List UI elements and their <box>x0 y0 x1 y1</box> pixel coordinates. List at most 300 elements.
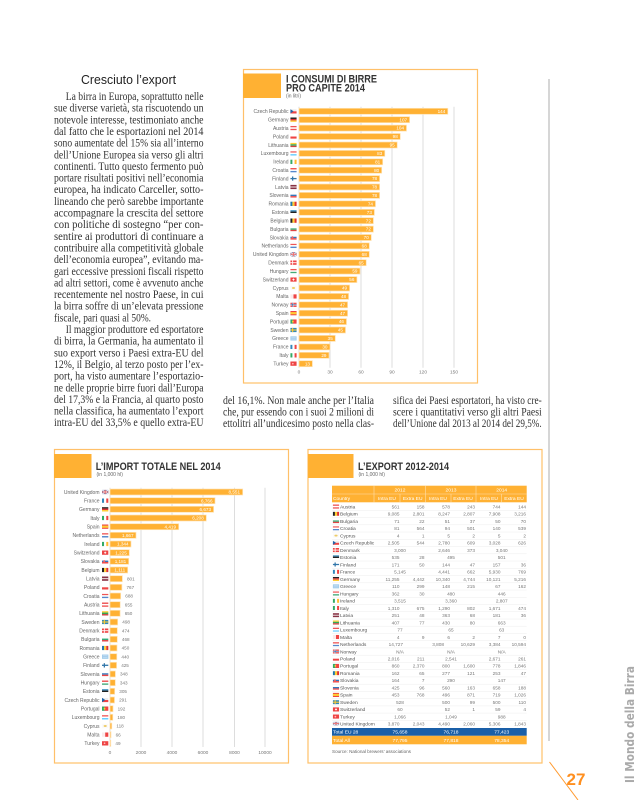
bar: Latvia: 801 <box>127 576 135 581</box>
row: Estonia <box>333 555 506 561</box>
text block: left column article: con politiche di sostegno “per con- <box>54 219 204 231</box>
row: Switzerland: 4 <box>523 707 526 712</box>
text block: left column article: la birra soffre di un’elevata pressione <box>54 301 204 313</box>
bar: Belgium: 72 <box>366 218 371 223</box>
row: Finland: 171 <box>392 562 400 567</box>
bar: Portugal: Portugal <box>270 319 288 325</box>
bar: Finland: Finland <box>83 663 100 669</box>
row: Sweden: 99 <box>470 700 475 705</box>
bar: Austria <box>84 602 133 608</box>
row: Ireland <box>333 599 508 605</box>
row: Germany: 5,216 <box>514 577 526 582</box>
row: Norway: N/A <box>396 649 405 654</box>
row: France: France <box>340 570 356 576</box>
row: Greece: 110 <box>392 584 400 589</box>
row: Austria <box>333 504 526 510</box>
text block: left column article <box>54 91 204 429</box>
row: Netherlands: Netherlands <box>340 642 367 648</box>
bar: Spain: Spain <box>276 311 289 317</box>
row: Latvia: 36 <box>521 613 526 618</box>
row: Croatia <box>333 526 526 532</box>
bar: Czech Republic <box>64 697 127 704</box>
table header: Extra EU <box>453 496 473 502</box>
row: Croatia: 501 <box>467 526 475 531</box>
bar: Poland: 767 <box>126 585 135 590</box>
row: Denmark: 3,000 <box>394 548 406 553</box>
row: Sweden: Sweden <box>340 700 358 706</box>
row: Austria: 561 <box>392 504 400 509</box>
bar: Sweden <box>81 619 130 626</box>
row: Italy: 1,290 <box>438 606 450 611</box>
bar: Estonia <box>83 688 127 695</box>
bar: Portugal <box>270 319 346 325</box>
row: Croatia: 94 <box>445 526 450 531</box>
bar: Lithuania <box>268 142 397 149</box>
row: Austria: Austria <box>340 504 356 510</box>
row: Netherlands: 10,594 <box>512 642 526 647</box>
source note: Source: National brewers’ associations <box>332 749 412 754</box>
row: Italy <box>333 606 526 612</box>
bar: Romania: 74 <box>368 201 373 206</box>
panel: import totale <box>54 450 288 763</box>
panel title: PRO CAPITE 2014 <box>286 83 366 95</box>
row: United Kingdom: 3,870 <box>388 721 400 726</box>
bar: Hungary: 59 <box>352 269 358 274</box>
row: Hungary: Hungary <box>340 591 359 597</box>
bar: Slovakia: Slovakia <box>270 235 289 241</box>
row: Turkey <box>333 714 506 720</box>
row: Denmark: Denmark <box>340 548 360 554</box>
bar: Belgium: Belgium <box>81 568 100 574</box>
bar: Turkey: 13 <box>305 361 310 366</box>
bar: Denmark <box>79 628 130 634</box>
row: Romania: Romania <box>340 671 360 677</box>
row: Denmark: 3,040 <box>496 548 508 553</box>
row: Croatia: 140 <box>493 526 501 531</box>
row: Switzerland <box>333 707 526 713</box>
bar: United Kingdom: 8,551 <box>228 490 240 495</box>
panel title: (in 1,000 hl) <box>358 472 385 478</box>
row: Belgium: Belgium <box>340 512 358 518</box>
row: Latvia: 68 <box>470 613 475 618</box>
icon: orange title block <box>308 454 354 478</box>
panel title: L’EXPORT 2012-2014 <box>358 461 450 473</box>
bar: Cyprus: 118 <box>116 724 124 729</box>
row: Total EU 28: Total EU 28 <box>333 730 359 736</box>
row: Italy: 802 <box>467 606 475 611</box>
bar: Cyprus <box>84 723 124 730</box>
panel title: (in litri) <box>286 94 301 100</box>
row: Spain: 719 <box>493 693 501 698</box>
bar: Latvia <box>86 576 135 582</box>
bar: Lithuania: Lithuania <box>79 611 100 617</box>
bar: Ireland: 1,344 <box>117 542 129 547</box>
bar: Malta: Malta <box>276 294 289 300</box>
axis labels: 30 <box>327 370 333 376</box>
bar: Slovakia: 70 <box>364 235 369 240</box>
bar: United Kingdom: United Kingdom <box>64 490 100 496</box>
bar: Netherlands: Netherlands <box>262 244 289 250</box>
text block: left column article: sono aumentate del 15% sia all’interno <box>54 138 204 150</box>
bar: Italy <box>90 515 206 522</box>
bar: Lithuania: 95 <box>390 143 395 148</box>
row: Finland: 36 <box>521 562 526 567</box>
bar: Greece <box>83 654 130 660</box>
row: Finland: 157 <box>493 562 501 567</box>
bar: Lithuania: Lithuania <box>268 143 289 149</box>
row: Ireland: 2,807 <box>496 599 508 604</box>
bar: Finland: Finland <box>272 176 289 182</box>
bar: Luxembourg <box>72 714 126 721</box>
text block: middle column article: ettolitri all’undicesimo posto nella clas- <box>223 418 374 430</box>
row: Finland: 47 <box>470 562 475 567</box>
row: Total All: Total All <box>333 738 350 744</box>
bar: Slovenia <box>269 192 380 199</box>
bar: Belgium <box>81 567 128 574</box>
row: Lithuania: Lithuania <box>340 620 360 626</box>
row: Malta: 4 <box>397 635 400 640</box>
row: Portugal: Portugal <box>340 664 358 670</box>
row: Belgium: 2,801 <box>413 512 425 517</box>
row: Netherlands: 10,629 <box>461 642 475 647</box>
bar: Italy <box>279 352 329 359</box>
row: Romania: 65 <box>419 671 425 676</box>
row: Portugal: 800 <box>442 664 450 669</box>
panel: consumi di birre pro capite <box>243 70 478 383</box>
bar: Slovenia: 78 <box>372 193 378 198</box>
text block: left column article: nella classifica, ha aumentato l’export <box>54 406 204 418</box>
text block: right column article: sifica dei Paesi esportatori, ha visto cre- <box>393 395 542 407</box>
bar: Denmark: Denmark <box>268 261 289 267</box>
bar chart: consumption per capita <box>253 107 458 376</box>
panel title <box>96 461 221 478</box>
bar: Finland: 425 <box>121 663 129 668</box>
bar: Belgium <box>270 218 373 224</box>
row: Spain: Spain <box>340 693 353 699</box>
bar: Denmark: 474 <box>122 628 130 633</box>
bar: Ireland: Ireland <box>84 542 100 548</box>
page number: 27 <box>566 770 585 789</box>
text block: left column article: La birra in Europa, soprattutto nelle <box>66 91 204 103</box>
bar: Switzerland: Switzerland <box>263 277 289 283</box>
row: Croatia: 564 <box>417 526 425 531</box>
text block: middle column article: che, pur essendo con i suoi 2 milioni di <box>223 406 374 418</box>
bar: Cyprus: Cyprus <box>273 286 289 292</box>
bar: Bulgaria: 72 <box>366 227 371 232</box>
row: Slovakia: Slovakia <box>340 678 359 684</box>
row: Belgium: 7,908 <box>489 512 501 517</box>
row: Lithuania: 407 <box>392 620 400 625</box>
row: Italy: 474 <box>518 606 526 611</box>
text block: left column article: gari eccessive pressioni fiscali rispetto <box>54 266 204 278</box>
table header <box>332 486 527 502</box>
bar: United Kingdom: 68 <box>362 252 367 257</box>
bar: Hungary <box>270 268 360 275</box>
bar: Ireland: Ireland <box>273 160 289 166</box>
row: France: 769 <box>518 570 526 575</box>
row: France: 662 <box>467 570 475 575</box>
row: Finland <box>333 562 526 568</box>
row: Slovakia: 290 <box>447 678 455 683</box>
row: Cyprus: 1 <box>422 533 425 538</box>
row: Germany: 10,340 <box>436 577 450 582</box>
bar: Poland: Poland <box>84 585 100 591</box>
bar: Hungary: 343 <box>120 680 128 685</box>
row: Cyprus: 2 <box>472 533 475 538</box>
table header: Intra EU <box>480 496 498 502</box>
row: Slovakia: 164 <box>392 678 400 683</box>
row: Czech Republic: 626 <box>518 541 526 546</box>
bar: Turkey: Turkey <box>273 362 289 368</box>
bar: Germany: 107 <box>399 117 408 122</box>
bar: Latvia: Latvia <box>275 185 289 191</box>
row: Italy: Italy <box>340 606 350 612</box>
bar: Netherlands <box>262 243 369 250</box>
row: Lithuania: 80 <box>470 620 475 625</box>
bar: Malta: Malta <box>87 733 100 739</box>
row: Latvia: 363 <box>442 613 450 618</box>
row: Romania: 47 <box>521 671 526 676</box>
bar: Poland: 98 <box>393 134 398 139</box>
row: Greece: Greece <box>340 584 356 590</box>
bar: Romania <box>268 201 376 208</box>
bar: Malta: 48 <box>341 294 347 299</box>
row: Poland: 211 <box>417 656 425 661</box>
row: Malta <box>333 635 526 641</box>
text block: right column article <box>393 395 542 430</box>
text block: left column article: ad altri settori, come è avvenuto anche <box>54 277 204 289</box>
row: Malta: Malta <box>340 635 352 641</box>
bar: Austria: 655 <box>125 602 133 607</box>
row: Hungary: 446 <box>498 591 506 596</box>
row: Hungary: 362 <box>392 591 400 596</box>
row: Turkey: 1,066 <box>394 714 406 719</box>
text block: middle column article <box>223 395 374 430</box>
bar: Hungary <box>81 680 128 686</box>
panel title: (in 1,000 hl) <box>96 472 123 478</box>
row: Lithuania: 663 <box>498 620 506 625</box>
row: Greece <box>333 584 526 590</box>
row: Romania: 253 <box>493 671 501 676</box>
row: United Kingdom: 5,306 <box>489 721 501 726</box>
text block: left column article: contribuire alla competitività globale <box>54 242 204 254</box>
row: Switzerland: 60 <box>397 707 403 712</box>
bar: Latvia: 78 <box>372 185 378 190</box>
bar: Slovenia: Slovenia <box>80 672 100 678</box>
text block: right column article: dell’Unione dal 2013 al 2014 del 29,5%. <box>393 418 542 430</box>
row: Spain <box>333 693 526 699</box>
text block: left column article: recentemente nel nostro Paese, in cui <box>54 289 204 301</box>
text block: left column article: 12%, il Belgio, al terzo posto per l’ex- <box>54 359 204 371</box>
row: Bulgaria: Bulgaria <box>340 519 358 525</box>
bar: Bulgaria: Bulgaria <box>270 227 289 233</box>
panel title: I CONSUMI DI BIRRE <box>286 74 377 86</box>
bar: Spain: Spain <box>87 525 100 531</box>
row: Netherlands: 14,727 <box>389 642 403 647</box>
row: Greece: 67 <box>495 584 501 589</box>
bar: Czech Republic: Czech Republic <box>253 109 289 115</box>
row: Switzerland: Switzerland <box>340 707 366 713</box>
bar: Croatia: Croatia <box>83 594 100 600</box>
bar: Bulgaria <box>81 636 130 643</box>
bar: Switzerland <box>263 277 357 283</box>
row: United Kingdom: 4,490 <box>438 721 450 726</box>
bar: Switzerland <box>74 550 129 556</box>
bar: Switzerland: Switzerland <box>74 551 100 557</box>
row: Austria: 578 <box>442 504 450 509</box>
bar: Sweden: Sweden <box>270 328 289 334</box>
bar: Norway: 47 <box>340 302 346 307</box>
row: Slovenia: 560 <box>442 685 450 690</box>
row: Estonia: 28 <box>419 555 425 560</box>
row: Latvia <box>333 613 526 619</box>
bar: Turkey: Turkey <box>84 741 100 747</box>
axis labels: 4000 <box>167 750 178 756</box>
row: Slovenia: Slovenia <box>340 685 359 691</box>
text block: left column article: accompagnare la crescita del settore <box>54 208 204 220</box>
row: Belgium: 8,247 <box>438 512 450 517</box>
row: Luxembourg <box>333 628 505 634</box>
row: Greece: 215 <box>467 584 475 589</box>
icon: orange title block <box>54 454 92 478</box>
bar: Estonia: Estonia <box>83 689 100 695</box>
text block: right column article: scere i quantitativi verso gli altri Paesi <box>393 406 542 418</box>
row: Total All: 77,818 <box>444 738 459 744</box>
row: Italy: 1,671 <box>489 606 501 611</box>
text block: left column article: port, ha visto aumentare l’esportazio- <box>54 371 204 383</box>
row: Germany: 4,442 <box>413 577 425 582</box>
heading: Cresciuto l'export: Cresciuto l’export <box>81 72 176 87</box>
row: Spain: 453 <box>392 693 400 698</box>
bar: Italy: 29 <box>321 353 327 358</box>
row: Slovakia: 147 <box>498 678 506 683</box>
bar: Spain <box>276 310 348 317</box>
bar: Norway: Norway <box>272 303 289 309</box>
bar: Slovenia: Slovenia <box>269 193 289 199</box>
bar: Bulgaria <box>270 226 373 233</box>
axis labels: 8000 <box>229 750 240 756</box>
table header: 2013 <box>446 488 457 494</box>
bar: Slovakia: 1,181 <box>115 559 127 564</box>
row: Czech Republic: 609 <box>467 541 475 546</box>
bar: Norway <box>272 302 348 309</box>
axis labels: 90 <box>389 370 395 376</box>
icon: orange title block <box>243 74 281 98</box>
bar: Greece: 35 <box>328 336 333 341</box>
row: Finland: 144 <box>442 562 450 567</box>
axis labels: 10000 <box>258 750 272 756</box>
row: Poland: 2,016 <box>388 656 400 661</box>
bar: Estonia <box>272 209 374 216</box>
row: Czech Republic <box>333 541 526 547</box>
row: Poland: 2,671 <box>489 656 501 661</box>
row: Spain: 871 <box>467 693 475 698</box>
bar: Greece: Greece <box>83 655 100 661</box>
row: Romania: 162 <box>392 671 400 676</box>
row: Denmark: 373 <box>467 548 475 553</box>
row: Total All: 77,795 <box>393 738 408 744</box>
bar: Greece: Greece <box>272 336 289 342</box>
table header: 2012 <box>395 488 406 494</box>
bar: Romania: 450 <box>122 646 130 651</box>
bar: Croatia: 688 <box>125 594 133 599</box>
bar: Denmark <box>268 260 366 266</box>
row: Ireland: 3,360 <box>445 599 457 604</box>
row: Malta: 7 <box>498 635 501 640</box>
bar: Croatia: Croatia <box>272 168 289 174</box>
row: Sweden: 528 <box>396 700 404 705</box>
row: Luxembourg: Luxembourg <box>340 627 367 633</box>
bar: Hungary: Hungary <box>81 681 100 687</box>
bar: Greece <box>272 335 335 342</box>
bar: Spain: 4,419 <box>164 524 176 529</box>
row: Poland <box>333 656 526 662</box>
row: Malta: 9 <box>422 635 425 640</box>
bar: Croatia <box>272 167 382 174</box>
row: Hungary: 480 <box>447 591 455 596</box>
row: Poland: Poland <box>340 656 356 662</box>
row: Sweden: 500 <box>493 700 501 705</box>
text block: left column article: di birra, la Germania, ha aumentato il <box>54 336 204 348</box>
text block: left column article: ne delle proprie birre fuori dall’Europa <box>54 382 204 394</box>
bar: Ireland <box>84 541 131 548</box>
table: export by country <box>332 486 527 744</box>
axis labels: 6000 <box>198 750 209 756</box>
row: Slovakia <box>333 678 506 684</box>
row: Lithuania: 77 <box>419 620 425 625</box>
row: France: 4,441 <box>438 570 450 575</box>
section label: Il Mondo della Birra: Il Mondo della Birra <box>622 666 637 783</box>
bar: Switzerland: 56 <box>349 277 355 282</box>
axis labels: 60 <box>358 370 364 376</box>
bar: Lithuania: 650 <box>125 611 133 616</box>
bar: Ireland <box>273 159 383 166</box>
row: Slovenia <box>333 686 526 692</box>
row: Turkey: 988 <box>498 714 506 719</box>
bar: Latvia: Latvia <box>86 577 100 583</box>
row: Croatia: 539 <box>518 526 526 531</box>
row: Croatia: 81 <box>394 526 400 531</box>
page corner diagonal line <box>550 762 578 800</box>
text block: left column article: dell’Unione Europea sia verso gli altri <box>54 149 204 161</box>
bar: Turkey: 49 <box>115 741 121 746</box>
axis labels: 150 <box>450 370 458 376</box>
row: Greece: 162 <box>518 584 526 589</box>
row: Estonia: 501 <box>498 555 506 560</box>
row: Total All <box>332 736 527 744</box>
row: Greece: 148 <box>442 584 450 589</box>
text block: middle column article: del 16,1%. Non male anche per l’Italia <box>223 395 374 407</box>
row: Portugal: 2,370 <box>413 664 425 669</box>
row: Portugal: 1,846 <box>514 664 526 669</box>
row: Malta: 2 <box>472 635 475 640</box>
row: Italy: 675 <box>417 606 425 611</box>
axis labels: 0 <box>109 750 112 756</box>
bar: Italy: 6,208 <box>192 516 204 521</box>
row: Bulgaria: 70 <box>521 519 526 524</box>
panel title <box>286 74 377 100</box>
row: Total EU 28: 77,423 <box>494 730 509 736</box>
bar: Cyprus <box>273 285 350 292</box>
bar: Austria: Austria <box>273 126 289 132</box>
bar: Germany: 6,673 <box>200 507 211 512</box>
row: Slovakia: 7 <box>422 678 425 683</box>
bar: France <box>273 344 330 351</box>
row: Norway: N/A <box>498 649 506 654</box>
panel title <box>358 461 450 478</box>
bar: Hungary: Hungary <box>270 269 289 275</box>
text block: left column article: intra-EU del 33,5% e quello extra-EU <box>54 417 204 429</box>
